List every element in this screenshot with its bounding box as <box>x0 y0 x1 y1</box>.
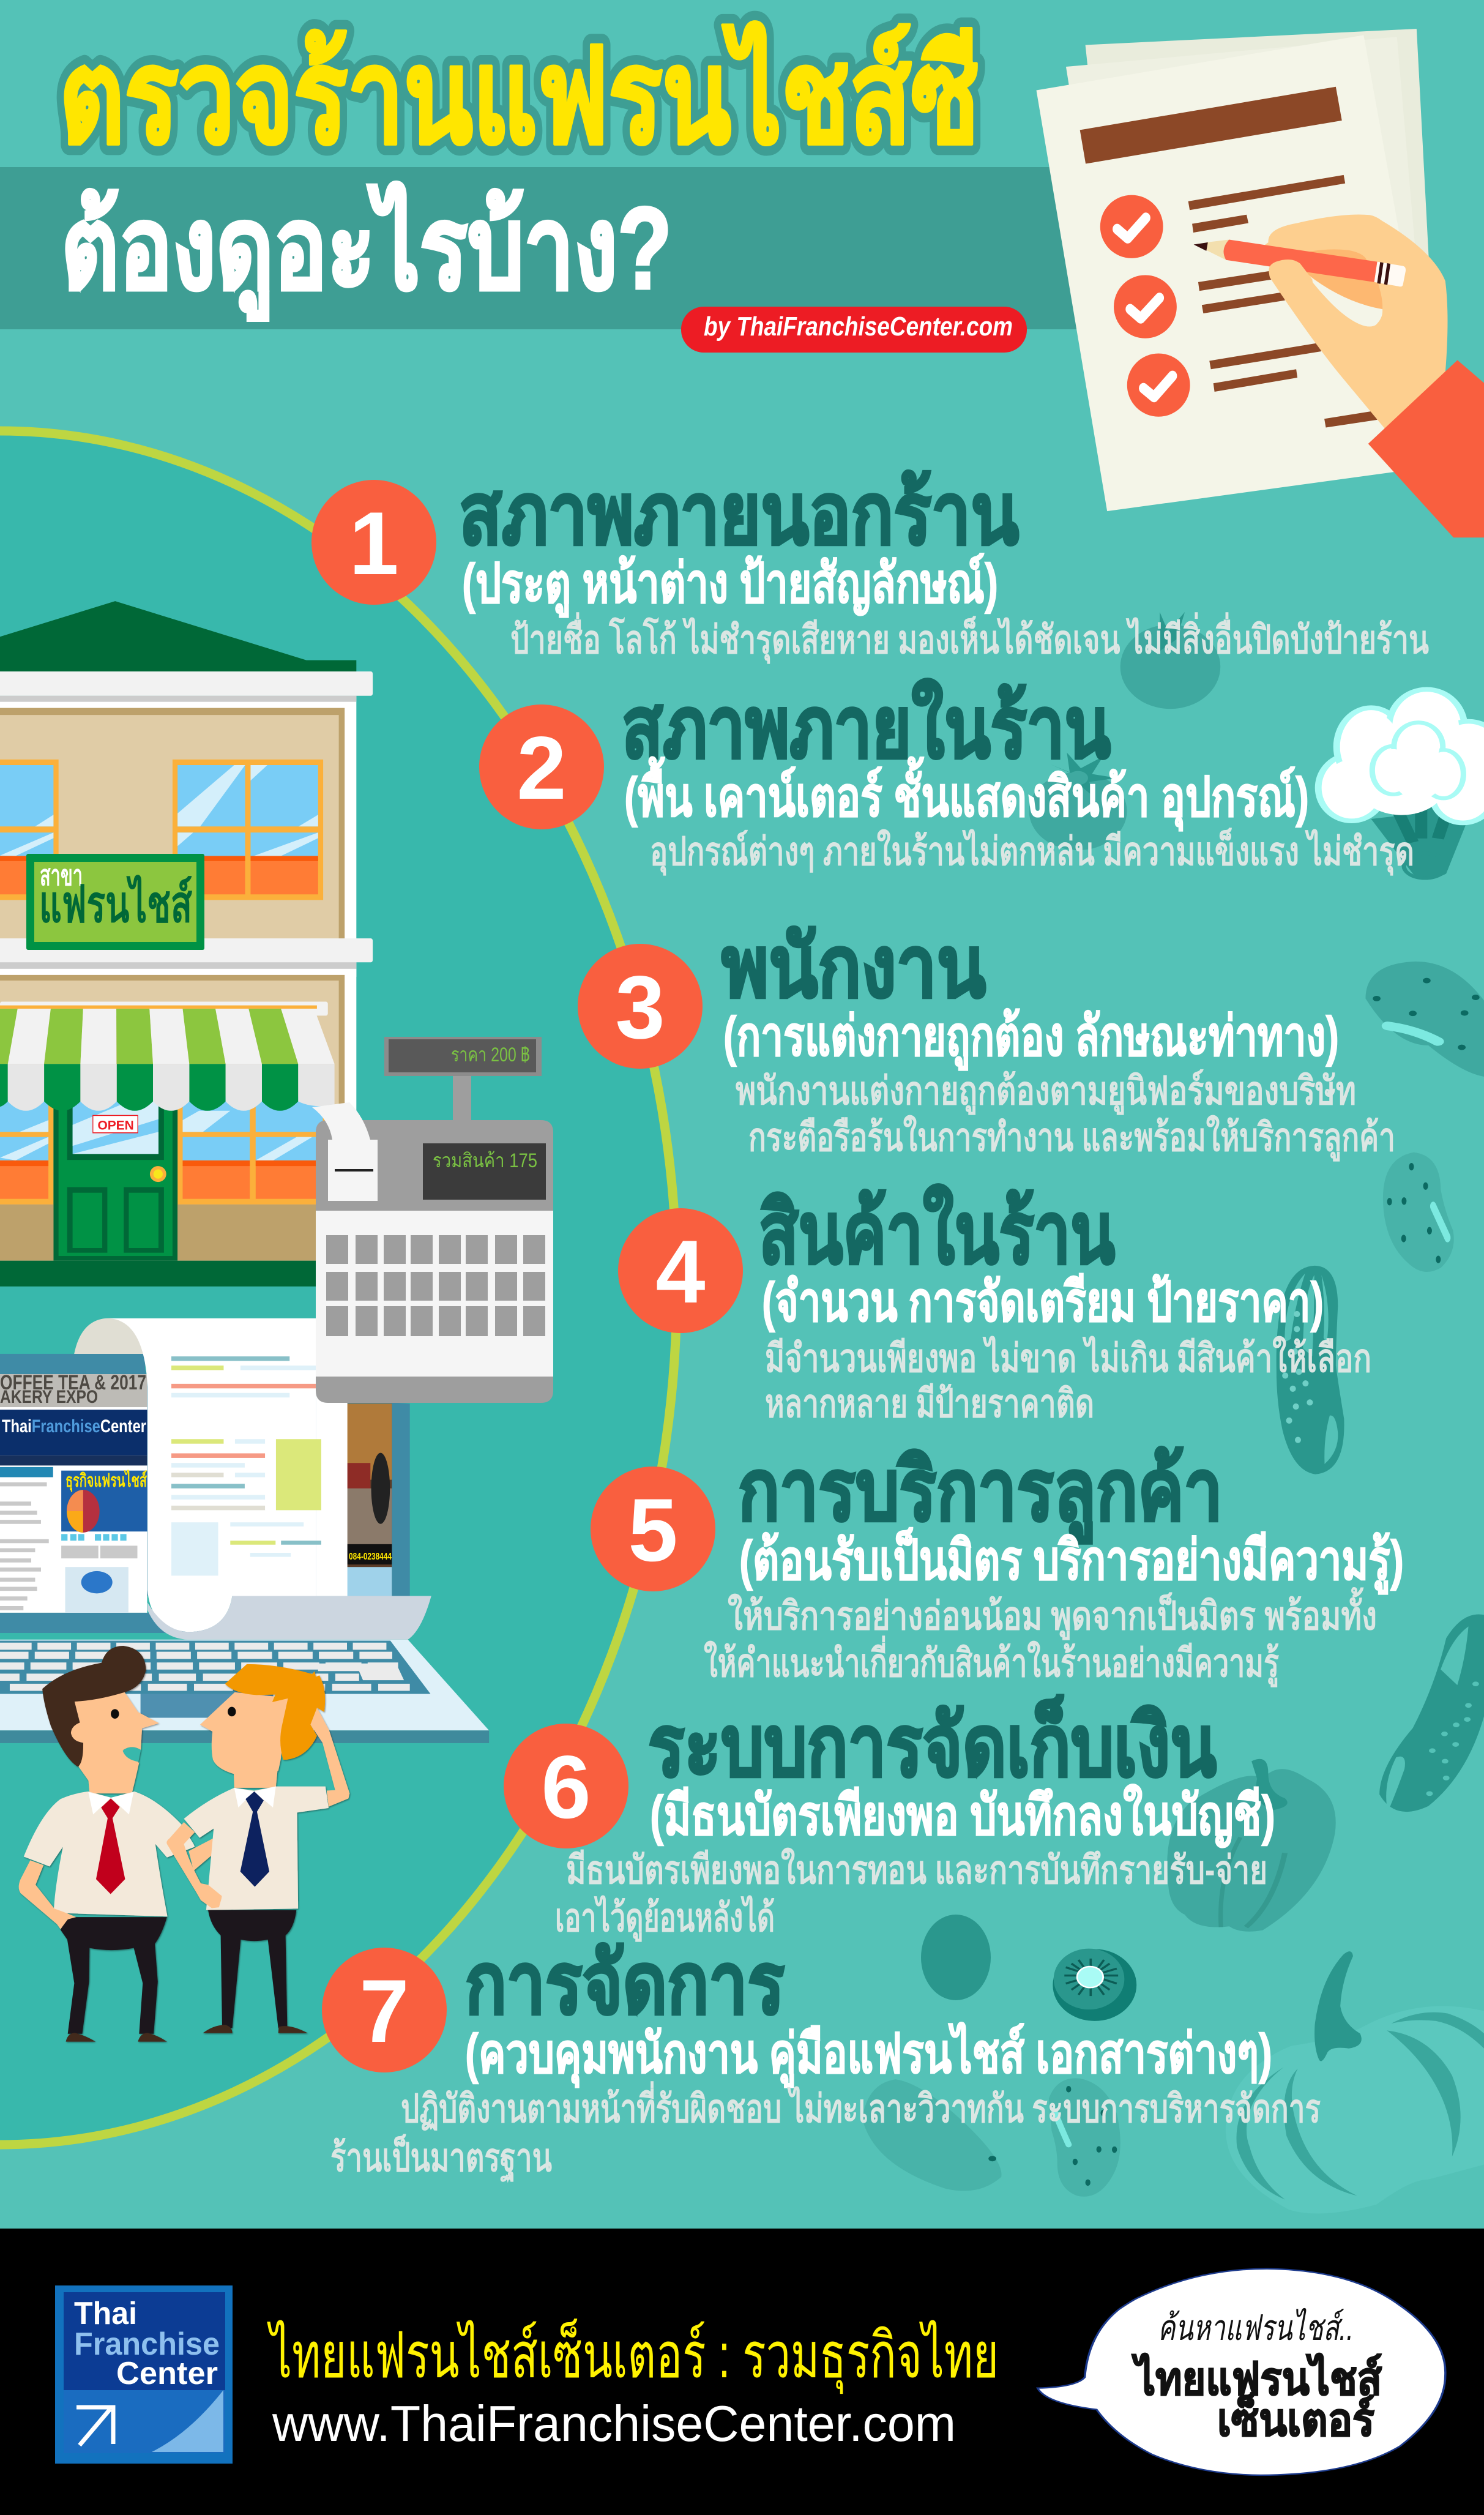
pencil <box>1194 239 1406 286</box>
price display: ราคา 200 ฿ <box>451 1044 530 1066</box>
laptop lid <box>0 1354 410 1596</box>
marker 4 <box>618 1208 743 1333</box>
heading 1: สภาพภายนอกร้าน <box>459 466 1019 562</box>
logo arrow icon <box>76 2407 113 2445</box>
marker 6: 6 <box>541 1737 591 1837</box>
open sign <box>93 1115 138 1133</box>
heading 3: พนักงาน <box>721 919 986 1015</box>
screenshot text: OFFEE TEA & 2017 <box>0 1371 146 1394</box>
marker 1 <box>311 480 436 605</box>
register base <box>316 1377 553 1403</box>
heading 2: สภาพภายในร้าน <box>622 679 1111 775</box>
vegetable: pepper <box>1167 1759 1336 1932</box>
logo text: Franchise <box>74 2326 220 2362</box>
item 5 <box>591 1442 1404 1687</box>
vegetable: pumpkin <box>1226 1951 1484 2213</box>
vegetable: bean 3 <box>1049 2078 1120 2197</box>
description 7 line 2: ร้านเป็นมาตรฐาน <box>330 2134 552 2183</box>
register top <box>316 1120 553 1211</box>
screenshot text: 084-0238444 <box>349 1552 392 1562</box>
shop sign <box>26 854 204 950</box>
vegetable: tomato 2 <box>1029 753 1127 850</box>
background vegetables <box>862 612 1484 2213</box>
heading 5: การบริการลูกค้า <box>738 1442 1223 1544</box>
sleeve <box>1368 360 1484 537</box>
right side of screen <box>347 1403 392 1596</box>
hand <box>1262 215 1447 428</box>
ledge <box>0 938 373 962</box>
two businessmen <box>19 1646 349 2042</box>
check icon 3 <box>1127 353 1190 417</box>
marker 3 <box>578 944 703 1069</box>
bubble name: ไทยแฟรนไชส์ <box>1132 2352 1382 2404</box>
vegetable: bean with dots <box>1383 1153 1454 1272</box>
finger <box>1269 260 1315 302</box>
bubble name line 2: เซ็นเตอร์ <box>1217 2393 1374 2445</box>
by-line pill <box>681 307 1027 353</box>
description 6 line 2: เอาไว้ดูย้อนหลังได้ <box>555 1895 775 1942</box>
upper wall <box>0 696 356 977</box>
title: ตรวจร้านแฟรนไชส์ซี <box>59 21 979 170</box>
paper sheet <box>74 1318 431 1640</box>
price display <box>384 1037 542 1076</box>
door <box>53 1101 177 1261</box>
franchise shop building <box>0 601 373 1287</box>
list lines <box>1188 175 1378 428</box>
footer yellow line: ไทยแฟรนไชส์เซ็นเตอร์ : รวมธุรกิจไทย <box>267 2318 999 2394</box>
awning <box>0 1009 335 1111</box>
vegetable: potato 2 <box>862 2079 1001 2191</box>
display pole <box>453 1075 471 1120</box>
description 5 line 2: ให้คำแนะนำเกี่ยวกับสินค้าในร้านอย่างมีความรู้ <box>704 1635 1279 1687</box>
brown header <box>1080 87 1342 163</box>
cash register <box>312 1037 553 1403</box>
vegetable: dark bean <box>921 1915 991 2000</box>
sign large text: แฟรนไชส์ <box>39 875 192 933</box>
lower windows <box>0 1097 326 1205</box>
heading 4: สินค้าในร้าน <box>759 1184 1115 1281</box>
man left <box>19 1646 213 2042</box>
item 7 <box>322 1935 1321 2183</box>
subheading 6: (มีธนบัตรเพียงพอ บันทึกลงในบัญชี) <box>650 1784 1275 1848</box>
speech bubble <box>1037 2269 1445 2475</box>
marker 1: 1 <box>349 493 399 593</box>
roof <box>0 601 356 671</box>
marker 7: 7 <box>359 1961 409 2061</box>
trackpad <box>141 1694 273 1717</box>
title band <box>0 167 1077 329</box>
marker 2: 2 <box>516 718 567 818</box>
marker 7 <box>322 1948 447 2072</box>
vegetable: cucumber 2 <box>1379 1614 1484 1812</box>
lower wall <box>0 969 356 1269</box>
logo text: Center <box>116 2356 218 2391</box>
screenshot text <box>0 1371 392 1562</box>
vegetable: broccoli <box>1318 689 1484 880</box>
bubble script text: ค้นหาแฟรนไชส์.. <box>1158 2308 1354 2348</box>
palm gap <box>1305 272 1382 327</box>
marker 5 <box>591 1467 715 1591</box>
marker 4: 4 <box>655 1222 706 1321</box>
marker 2 <box>479 704 604 829</box>
upper right window <box>173 760 323 900</box>
footer url: www.ThaiFranchiseCenter.com <box>272 2395 956 2452</box>
website screenshot <box>0 1374 147 1613</box>
screen: รวมสินค้า 175 <box>433 1149 537 1172</box>
cornice <box>0 671 373 696</box>
item 6 <box>504 1694 1275 1942</box>
check icon 2 <box>1114 275 1177 338</box>
title: ตรวจร้านแฟรนไชส์ซี <box>59 21 979 170</box>
screenshot text: ธุรกิจแฟรนไชส์ <box>65 1470 147 1492</box>
logo text: Thai <box>74 2296 137 2331</box>
receipt printer <box>312 1102 378 1201</box>
vegetable: cucumber 1 <box>1277 1266 1344 1474</box>
marker 3: 3 <box>615 957 665 1057</box>
marker 6 <box>504 1724 628 1848</box>
sign small text: สาขา <box>40 859 83 891</box>
back sheets <box>1086 29 1439 471</box>
item 4 <box>618 1184 1371 1426</box>
checklist with hand <box>1036 29 1484 537</box>
screenshot text: ThaiFranchiseCenter <box>2 1416 146 1437</box>
description 4 line 2: หลากหลาย มีป้ายราคาติด <box>765 1381 1094 1426</box>
open sign: OPEN <box>97 1118 134 1133</box>
check icon 1 <box>1100 195 1163 258</box>
footer logo <box>55 2285 233 2464</box>
vegetable: potato 1 <box>1365 962 1484 1077</box>
description 6 line 1: มีธนบัตรเพียงพอในการทอน และการบันทึกรายรับ-จ่าย <box>566 1847 1267 1892</box>
key body <box>316 1211 553 1377</box>
screenshot text: AKERY EXPO <box>0 1387 98 1407</box>
item 1 <box>311 466 1429 664</box>
palm shadow <box>1270 249 1382 310</box>
vegetable: kiwi <box>1053 1949 1136 2021</box>
upper left window <box>0 760 59 900</box>
front sheet <box>1036 35 1441 511</box>
subheading 1: (ประตู หน้าต่าง ป้ายสัญลักษณ์) <box>462 553 998 618</box>
deck <box>0 1640 489 1730</box>
heading 6: ระบบการจัดเก็บเงิน <box>648 1694 1217 1794</box>
keys <box>326 1235 545 1336</box>
item 2 <box>479 679 1414 876</box>
by-line pill: by ThaiFranchiseCenter.com <box>704 312 1013 342</box>
heading 7: การจัดการ <box>465 1935 785 2031</box>
footer band <box>0 2229 1484 2515</box>
screen <box>423 1143 546 1200</box>
keyboard <box>0 1640 430 1694</box>
subtitle: ต้องดูอะไรบ้าง? <box>61 182 672 321</box>
vegetable: tomato 1 <box>1120 612 1220 709</box>
item 3 <box>578 919 1395 1162</box>
base <box>0 1205 53 1261</box>
laptop <box>0 1318 489 1743</box>
marker 5: 5 <box>628 1480 678 1580</box>
circle panel with ring <box>0 431 677 2145</box>
man right <box>166 1664 349 2033</box>
